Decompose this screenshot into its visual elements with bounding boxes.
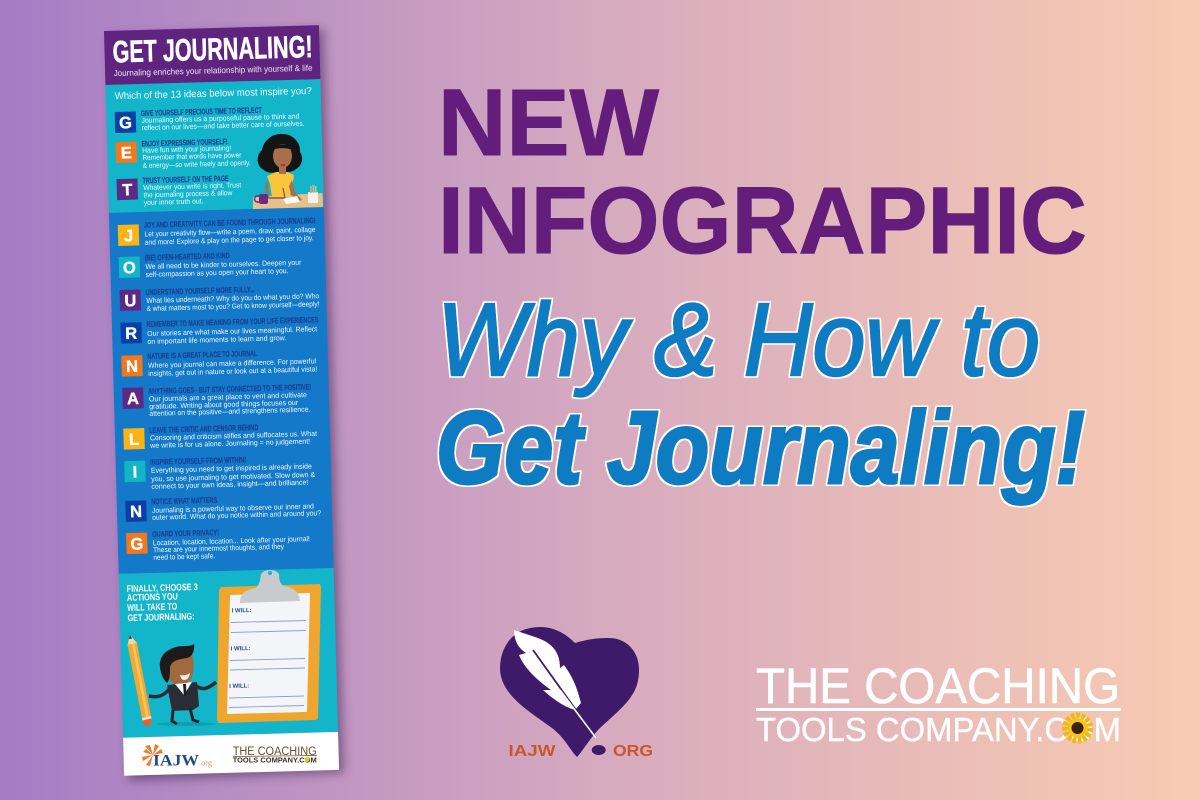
write-in lines bbox=[229, 620, 306, 708]
teal section: actions bbox=[119, 568, 338, 738]
idea R: on important life moments to learn and grow. bbox=[147, 333, 286, 346]
logo: The Coaching Tools Company bbox=[756, 658, 1121, 748]
idea O: We all need to be kinder to ourselves. Deepen your bbox=[145, 258, 302, 271]
blue section: JOURNALING bbox=[109, 207, 334, 574]
idea T: the journaling process & allow bbox=[143, 188, 233, 199]
idea U: What lies underneath? Why do you do what you do? Who bbox=[146, 291, 319, 305]
idea R: Our stories are what make our lives meaningful. Reflect bbox=[147, 324, 317, 338]
idea U: U bbox=[124, 292, 137, 310]
idea T: T bbox=[122, 181, 133, 199]
idea G: G bbox=[119, 114, 132, 132]
teal section: actions: WILL TAKE TO bbox=[127, 602, 177, 614]
teal section: GET: Which of the 13 ideas below most inspire you? bbox=[115, 86, 312, 102]
idea L: Censoring and criticism stifles and suffocates us. What bbox=[150, 429, 317, 442]
idea N: Where you journal can make a difference. For powerful bbox=[148, 356, 316, 370]
idea N: NATURE IS A GREAT PLACE TO JOURNAL bbox=[147, 349, 257, 361]
idea L: we write is for us alone. Journaling = no judgement! bbox=[149, 437, 310, 450]
idea O: O bbox=[123, 259, 136, 277]
idea O: self-compassion as you open your heart to you. bbox=[145, 266, 289, 279]
idea A: A bbox=[127, 390, 139, 408]
idea E bbox=[115, 137, 251, 171]
idea A: gratitude. Writing about good things focuses our bbox=[149, 398, 299, 411]
idea J: JOY AND CREATIVITY CAN BE FOUND THROUGH JOURNALING! bbox=[144, 216, 316, 230]
idea G: reflect on our lives—and take better care of ourselves. bbox=[142, 119, 305, 132]
idea E: E bbox=[121, 144, 132, 162]
logo: The Coaching Tools Company: TOOLS COMPANY.COM bbox=[756, 711, 1121, 748]
idea U bbox=[119, 283, 320, 314]
teal section: actions: FINALLY, CHOOSE 3 bbox=[127, 582, 198, 595]
idea I: you, so use journaling to get motivated. Slow down & bbox=[151, 470, 315, 483]
logo: IAJW small: IAJW bbox=[153, 752, 199, 770]
idea N: insights, get out in nature or look out at a beautiful vista! bbox=[148, 364, 317, 378]
teal section: actions: ACTIONS YOU bbox=[127, 592, 178, 604]
idea G: Journaling offers us a purposeful pause to think and bbox=[141, 112, 299, 125]
idea U: UNDERSTAND YOURSELF MORE FULLY... bbox=[145, 285, 255, 297]
idea R: R bbox=[125, 325, 137, 343]
idea O: (BE) OPEN-HEARTED AND KIND bbox=[145, 251, 230, 262]
idea E: Remember that words have power bbox=[142, 150, 242, 162]
illustration: businessman bbox=[149, 644, 216, 726]
idea A bbox=[122, 383, 312, 419]
idea I bbox=[124, 453, 316, 492]
idea N: N bbox=[126, 358, 138, 376]
idea I: INSPIRE YOURSELF FROM WITHIN! bbox=[150, 455, 246, 467]
illustration: woman journaling bbox=[253, 134, 323, 209]
headline: get journaling: Get Journaling! bbox=[436, 390, 1085, 505]
idea N bbox=[121, 347, 317, 379]
idea L bbox=[123, 421, 317, 451]
infographic poster bbox=[104, 25, 339, 776]
idea E: & energy—so write freely and openly. bbox=[143, 158, 251, 170]
idea G (guard) bbox=[126, 526, 310, 563]
idea G (guard): G bbox=[130, 535, 144, 554]
logo: IAJW heart and quill: IAJW bbox=[508, 743, 557, 760]
idea R: REMEMBER TO MAKE MEANING FROM YOUR LIFE EXPERIENCES bbox=[146, 315, 319, 329]
teal section: actions: GET JOURNALING: bbox=[127, 611, 195, 624]
idea L: LEAVE THE CRITIC AND CENSOR BEHIND bbox=[149, 423, 259, 435]
illustration: clipboard: I WILL: bbox=[232, 608, 252, 614]
idea N (notice): outer world. What do you notice within and around you? bbox=[152, 508, 321, 522]
headline: why and how to: Why & How to bbox=[437, 282, 1040, 397]
idea N (notice) bbox=[125, 493, 321, 523]
logo: IAJW small bbox=[142, 744, 212, 770]
idea I: connect to your own ideas, insight—and brilliance! bbox=[151, 478, 308, 491]
logo: IAJW small: .org bbox=[199, 758, 212, 768]
idea O bbox=[119, 249, 302, 280]
idea T: Whatever you write is right. Trust bbox=[143, 180, 241, 192]
idea G (guard): Location, location, location... Look after your journal! bbox=[153, 534, 310, 547]
logo: The Coaching Tools Company small: THE COACHING bbox=[233, 746, 317, 758]
idea J: Let your creativity flow—write a poem, draw, paint, collage bbox=[144, 225, 316, 238]
idea G (guard): GUARD YOUR PRIVACY! bbox=[152, 528, 219, 539]
idea G bbox=[115, 105, 305, 133]
idea N (notice): Journaling is a powerful way to observe our inner and bbox=[152, 501, 314, 515]
idea I: Everything you need to get inspired is already inside bbox=[151, 462, 312, 475]
headline: new infographic: NEW bbox=[438, 70, 659, 176]
idea E: ENJOY EXPRESSING YOURSELF! bbox=[141, 137, 228, 149]
illustration: clipboard: I WILL: bbox=[231, 646, 251, 652]
idea G (guard): need to be kept safe. bbox=[153, 551, 215, 562]
poster footer bbox=[123, 732, 339, 776]
idea T: TRUST YOURSELF ON THE PAGE bbox=[142, 174, 229, 185]
idea N (notice): N bbox=[130, 503, 142, 521]
icon: sunflower bbox=[1066, 716, 1090, 740]
idea J bbox=[118, 216, 316, 247]
logo: The Coaching Tools Company small: TOOLS COMPANY.COM bbox=[233, 756, 317, 764]
idea E: Have fun with your journaling! bbox=[142, 143, 231, 155]
idea A: Our journals are a great place to vent and cultivate bbox=[149, 390, 307, 403]
idea A: ANYTHING GOES - BUT STAY CONNECTED TO THE POSITIVE! bbox=[148, 383, 311, 396]
poster header: GET JOURNALING! bbox=[112, 29, 313, 69]
idea T: your inner truth out. bbox=[144, 196, 204, 207]
idea R bbox=[120, 315, 319, 347]
logo: IAJW heart and quill: ORG bbox=[613, 743, 653, 760]
logo: IAJW heart and quill bbox=[500, 627, 653, 760]
logo: The Coaching Tools Company small bbox=[233, 746, 317, 764]
poster header bbox=[104, 25, 320, 85]
illustration: clipboard bbox=[217, 570, 321, 723]
idea U: & what matters most to you? Get to know yourself—deeply! bbox=[146, 299, 320, 313]
idea J: J bbox=[124, 227, 133, 245]
idea I: I bbox=[132, 463, 137, 481]
idea T bbox=[116, 174, 242, 208]
headline: new infographic: INFOGRAPHIC bbox=[438, 168, 1087, 274]
logo: The Coaching Tools Company: THE COACHING bbox=[756, 658, 1120, 714]
idea L: L bbox=[129, 431, 139, 449]
idea G (guard): These are your innermost thoughts, and they bbox=[153, 542, 284, 554]
illustration: clipboard: I WILL: bbox=[229, 683, 249, 690]
headline: new infographic bbox=[438, 70, 1087, 274]
illustration: pencil bbox=[128, 635, 152, 726]
idea G: GIVE YOURSELF PRECIOUS TIME TO REFLECT bbox=[141, 106, 262, 118]
poster header: Journaling enriches your relationship with yourself & life bbox=[114, 63, 313, 78]
idea J: and more! Explore & play on the page to get closer to joy. bbox=[145, 233, 314, 247]
idea A: attention on the positive—and strengthens resilience. bbox=[149, 405, 310, 418]
idea N (notice): NOTICE WHAT MATTERS bbox=[151, 496, 218, 506]
panel shadow bbox=[110, 29, 344, 781]
teal section: GET bbox=[105, 79, 324, 213]
